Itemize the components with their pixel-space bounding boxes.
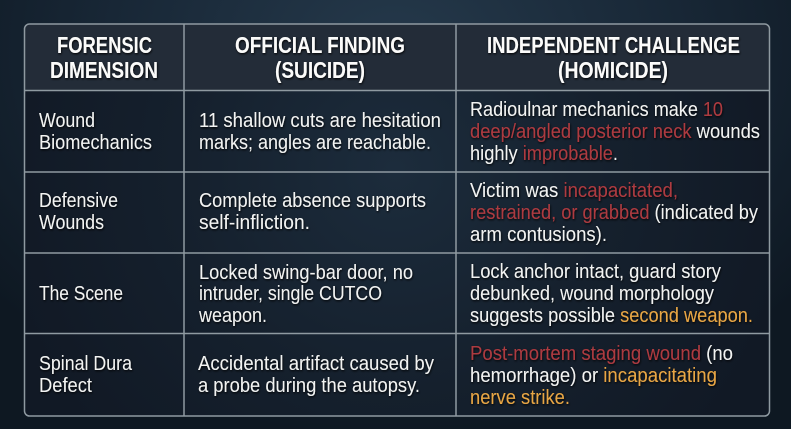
row 4 dimension: Defect: [39, 374, 92, 397]
row 1 independent challenge: Radioulnar mechanics make 10: [470, 98, 723, 121]
row 3 independent challenge: suggests possible second weapon.: [470, 304, 753, 327]
row 2 dimension: Wounds: [39, 211, 104, 234]
row 2 independent challenge: [470, 179, 759, 246]
row 1 independent challenge: highly improbable.: [470, 142, 618, 165]
row 2 independent challenge: arm contusions).: [470, 223, 607, 246]
heading: official finding: (SUICIDE): [275, 57, 365, 83]
row 3 independent challenge: [470, 260, 753, 327]
row 4 official finding: a probe during the autopsy.: [198, 374, 420, 397]
row 3 dimension: The Scene: [39, 282, 123, 305]
row 3 official finding: Locked swing-bar door, no: [199, 261, 413, 284]
row 2 official finding: Complete absence supports: [199, 189, 426, 212]
row 1 official finding: marks; angles are reachable.: [199, 131, 431, 154]
column headings: [50, 32, 740, 83]
heading: official finding: OFFICIAL FINDING: [235, 32, 405, 58]
heading: forensic dimension: DIMENSION: [50, 57, 158, 83]
row 2 dimension: Defensive: [39, 189, 118, 212]
heading: forensic dimension: [50, 32, 158, 83]
heading: official finding: [235, 32, 405, 83]
table rows: [39, 98, 760, 409]
heading: forensic dimension: FORENSIC: [57, 32, 152, 58]
row 4 official finding: Accidental artifact caused by: [198, 352, 435, 375]
row 1 official finding: [199, 109, 441, 154]
row 2 dimension: [39, 189, 118, 234]
heading: independent challenge: [487, 32, 740, 83]
row 3 independent challenge: Lock anchor intact, guard story: [470, 260, 722, 283]
row 1 dimension: Wound: [39, 109, 95, 132]
row 2 official finding: [199, 189, 426, 234]
row 1 dimension: [39, 109, 152, 154]
row 4 independent challenge: [470, 342, 733, 409]
heading: independent challenge: (HOMICIDE): [558, 57, 668, 83]
row 2 official finding: self-infliction.: [199, 211, 310, 234]
row 4 official finding: [198, 352, 435, 397]
row 1 official finding: 11 shallow cuts are hesitation: [199, 109, 441, 132]
row 4 dimension: Spinal Dura: [39, 352, 133, 375]
row 3 official finding: [198, 261, 413, 327]
row 4 independent challenge: hemorrhage) or incapacitating: [470, 364, 717, 387]
row 2 independent challenge: Victim was incapacitated,: [470, 179, 678, 202]
row 1 dimension: Biomechanics: [39, 131, 152, 154]
row 4 independent challenge: nerve strike.: [470, 386, 570, 409]
row 4 independent challenge: Post-mortem staging wound (no: [470, 342, 733, 365]
row 2 independent challenge: restrained, or grabbed (indicated by: [470, 201, 759, 224]
row 3 official finding: intruder, single CUTCO: [199, 282, 382, 305]
row 3 independent challenge: debunked, wound morphology: [470, 282, 715, 305]
row 1 independent challenge: [470, 98, 760, 165]
row 3 official finding: weapon.: [198, 304, 267, 327]
header row fill: [24, 24, 770, 90]
row 1 independent challenge: deep/angled posterior neck wounds: [470, 120, 760, 143]
row 4 dimension: [39, 352, 133, 397]
